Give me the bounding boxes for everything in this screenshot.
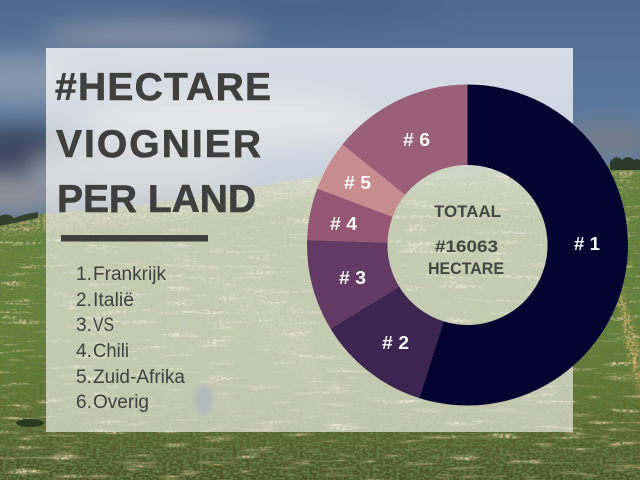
title: VIOGNIER xyxy=(56,123,261,166)
list: countries: 6. xyxy=(76,392,92,413)
donut centre: total xyxy=(428,202,504,278)
list: countries: Chili xyxy=(93,341,129,362)
segment labels: # 3 xyxy=(339,268,366,288)
donut centre: total: HECTARE xyxy=(428,259,504,278)
segment 4: Chili xyxy=(307,188,393,242)
list: countries: 1. xyxy=(76,264,92,285)
segment labels: # 1 xyxy=(574,234,600,254)
donut centre: total: #16063 xyxy=(435,237,498,256)
segment labels: # 6 xyxy=(403,130,430,150)
title: #HECTARE xyxy=(55,66,271,109)
list: countries: 2. xyxy=(76,290,92,311)
segment labels: # 5 xyxy=(344,173,371,193)
segment 3: VS xyxy=(307,240,399,329)
panel: translucent white overlay xyxy=(46,48,573,432)
segment 1: Frankrijk xyxy=(419,84,628,406)
donut chart xyxy=(307,84,628,406)
segment labels: # 4 xyxy=(330,214,357,234)
segment 5: Zuid-Afrika xyxy=(317,144,405,217)
list: countries: 4. xyxy=(76,341,92,362)
segment labels: # 2 xyxy=(382,333,409,353)
list: countries: Overig xyxy=(93,392,149,413)
title xyxy=(55,66,271,221)
title: PER LAND xyxy=(57,178,256,221)
divider under title xyxy=(61,235,208,242)
segment 6: Overig xyxy=(342,84,468,195)
segment labels xyxy=(330,130,600,353)
list: countries: Italië xyxy=(93,290,134,311)
list: countries: 3. xyxy=(76,315,92,336)
list: countries xyxy=(76,264,185,413)
segment 2: Italië xyxy=(330,287,444,398)
list: countries: 5. xyxy=(76,367,92,388)
list: countries: VS xyxy=(93,315,114,336)
list: countries: Frankrijk xyxy=(93,264,166,285)
donut centre: total: TOTAAL xyxy=(434,202,501,221)
list: countries: Zuid-Afrika xyxy=(93,367,185,388)
